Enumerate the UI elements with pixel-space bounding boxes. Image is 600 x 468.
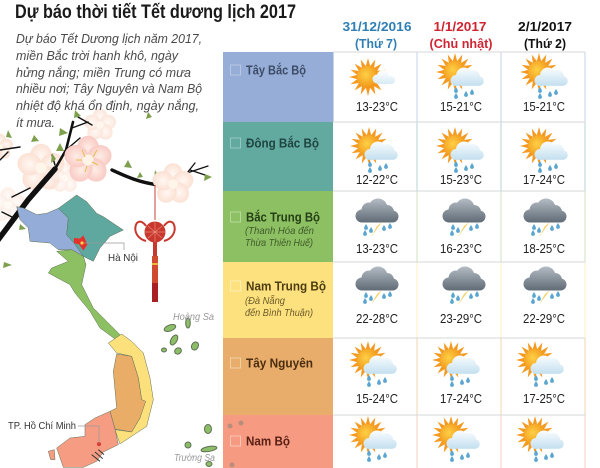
row label: Nam Bộ: Nam Bộ [246,434,290,448]
row 4 forecast: 22-29°C [523,311,565,326]
Ho Chi Minh City marker and label: TP. Hồ Chí Minh [8,420,76,432]
row 4 forecast: 22-28°C [356,311,398,326]
column header: 31/12/2016: (Thứ 7) [355,36,397,51]
row label: Bắc Trung Bộ [230,210,320,249]
region: Nam Trung Bộ [108,334,153,444]
intro text [16,31,202,130]
Hanoi marker and label [80,241,138,264]
column header: 1/1/2017 [430,19,492,51]
row 2 forecast: 17-24°C [523,172,565,187]
row 5 forecast: 17-24°C [440,391,482,406]
row label: Bắc Trung Bộ: (Thanh Hóa đến [245,225,314,237]
row 6 forecast [349,416,564,462]
row label: Bắc Trung Bộ: Bắc Trung Bộ [246,210,320,224]
islands [161,318,217,466]
row 1 forecast: 15-21°C [523,99,565,114]
intro text: nhiều nơi; Tây Nguyên và Nam Bộ [16,81,202,96]
map of Vietnam [17,195,217,467]
column header: 31/12/2016: 31/12/2016 [342,19,412,34]
intro text: hửng nắng; miền Trung có mưa [16,65,191,80]
blossom branch [0,108,212,268]
intro text: Dự báo Tết Dương lịch năm 2017, [16,31,202,46]
row 4 forecast [356,266,566,326]
Ho Chi Minh City marker and label [8,420,101,446]
row label: Nam Trung Bộ: Nam Trung Bộ [246,280,326,294]
title: Dự báo thời tiết Tết dương lịch 2017 [15,1,296,23]
row label: Nam Bộ [228,420,290,468]
row 2 forecast: 15-23°C [440,172,482,187]
column header: 2/1/2017: (Thứ 2) [524,36,566,51]
region: Nam Bộ [57,411,118,467]
row 3 forecast: 13-23°C [356,241,398,256]
intro text: nhiệt độ khá ổn định, ngày nắng, [16,98,199,113]
row 3 forecast: 16-23°C [440,241,482,256]
row label: Tây Bắc Bộ [230,62,306,78]
row 5 forecast: 17-25°C [523,391,565,406]
column header: 1/1/2017: (Chủ nhật) [430,36,492,51]
row label: Nam Trung Bộ: (Đà Nẵng [245,294,285,307]
row label: Nam Trung Bộ: đến Bình Thuận) [245,307,313,319]
Hanoi marker and label: Hà Nội [108,252,138,264]
row label: Tây Bắc Bộ: Tây Bắc Bộ [246,62,306,78]
row 4 forecast: 23-29°C [440,311,482,326]
row 2 forecast [350,127,568,187]
Hanoi [74,235,87,251]
row 1 forecast: 15-21°C [440,99,482,114]
islet [48,450,55,460]
row 5 forecast [349,341,565,406]
row label: Đông Bắc Bộ: Đông Bắc Bộ [246,136,319,150]
intro text: miền Bắc trời hanh khô, ngày [16,48,179,63]
column header: 2/1/2017: 2/1/2017 [518,19,572,34]
row 5 forecast: 15-24°C [356,391,398,406]
table row backgrounds [223,52,585,468]
column header: 1/1/2017: 1/1/2017 [434,19,486,34]
row 3 forecast: 18-25°C [523,241,565,256]
intro text: ít mưa. [16,115,55,130]
row 1 forecast: 13-23°C [356,99,398,114]
region: Bắc Trung Bộ [48,250,122,339]
row label: Tây Nguyên: Tây Nguyên [246,356,313,370]
region: Tây Bắc [17,207,83,256]
region: Tây Nguyên [110,354,146,432]
label: Trường Sa: Trường Sa [174,453,215,464]
row label: Nam Trung Bộ [230,280,326,319]
Mekong delta channels [92,450,104,461]
region: Đông Bắc [58,195,123,261]
label: Hoàng Sa: Hoàng Sa [173,312,214,323]
row 3 forecast [356,198,566,256]
row 2 forecast: 12-22°C [356,172,398,187]
row label: Bắc Trung Bộ: Thừa Thiên Huế) [245,237,313,249]
row 1 forecast [349,53,568,114]
icon: red Chinese knot [135,185,175,302]
column header: 2/1/2017 [518,19,572,51]
column header: 31/12/2016 [342,19,412,51]
